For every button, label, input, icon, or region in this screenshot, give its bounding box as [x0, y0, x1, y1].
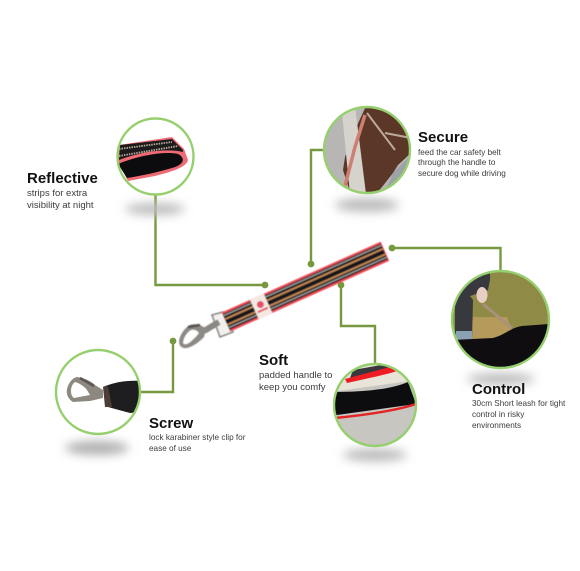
text: soft — [259, 352, 332, 393]
text: control: control in risky — [472, 410, 525, 419]
text: soft: keep you comfy — [259, 382, 326, 393]
shadow — [335, 198, 399, 212]
photo: padded handle — [333, 363, 417, 447]
photo: dog with seat belt — [323, 106, 411, 194]
text: reflective: visibility at night — [27, 200, 94, 211]
leash product — [179, 242, 389, 348]
text: screw: lock karabiner style clip for — [149, 433, 246, 442]
photo: karabiner clip — [67, 377, 140, 413]
panel: control — [451, 270, 551, 385]
text: control — [472, 381, 566, 430]
text: secure: Secure — [418, 129, 468, 146]
text: secure: secure dog while driving — [418, 169, 506, 178]
text: control: 30cm Short leash for tight — [472, 399, 566, 408]
connector: screw — [139, 338, 176, 392]
photo: leash walking — [451, 270, 551, 370]
photo: folded handle — [118, 137, 188, 181]
connector: control — [389, 245, 500, 271]
text: screw: ease of use — [149, 444, 192, 453]
panel: reflective — [118, 118, 194, 215]
panel: soft — [333, 363, 417, 462]
shadow — [125, 203, 185, 215]
text: reflective — [27, 170, 98, 211]
shadow — [343, 448, 407, 462]
text: screw — [149, 415, 246, 453]
text: screw: Screw — [149, 415, 194, 432]
text: control: Control — [472, 381, 525, 398]
shadow — [65, 441, 129, 455]
connector: secure — [308, 150, 325, 267]
shadow — [467, 373, 535, 385]
text: soft: padded handle to — [259, 370, 332, 381]
connector: reflective — [156, 195, 268, 288]
text: control: environments — [472, 421, 521, 430]
text: secure: feed the car safety belt — [418, 148, 502, 157]
text: reflective: Reflective — [27, 170, 98, 187]
karabiner clip — [179, 312, 233, 348]
panel: screw — [56, 350, 140, 455]
leash handle — [222, 242, 389, 332]
text: soft: Soft — [259, 352, 288, 369]
logo tag — [250, 294, 272, 319]
text: secure — [418, 129, 506, 178]
text: secure: through the handle to — [418, 158, 496, 167]
panel: secure — [323, 106, 411, 212]
connector: soft — [338, 282, 375, 365]
text: reflective: strips for extra — [27, 188, 88, 199]
